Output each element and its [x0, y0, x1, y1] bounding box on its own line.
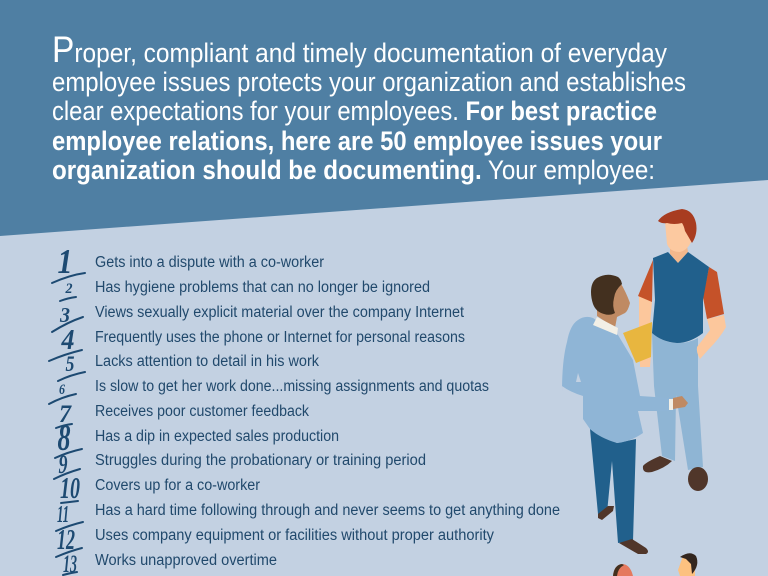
handwritten numbers 1 to 13 — [49, 242, 85, 576]
shoes — [643, 456, 672, 472]
numbered list of issues: Covers up for a co-worker — [95, 477, 260, 494]
numbered list of issues: Lacks attention to detail in his work — [95, 353, 319, 370]
numbered list of issues: Gets into a dispute with a co-worker — [95, 254, 324, 271]
neck — [670, 240, 688, 263]
trousers — [652, 333, 703, 470]
intro text block: employee issues protects your organization and establishes — [52, 67, 686, 97]
header banner — [0, 0, 768, 236]
right arm — [697, 315, 726, 359]
left arm — [639, 296, 652, 327]
handwritten numbers 1 to 13: 5 — [66, 351, 74, 376]
intro text block — [52, 29, 686, 185]
neck and face — [597, 282, 630, 328]
handwritten numbers 1 to 13: 12 — [57, 525, 75, 556]
handwritten numbers 1 to 13: 2 — [65, 281, 73, 297]
partial figure at bottom: coral head — [613, 564, 633, 576]
cuff — [669, 399, 673, 410]
illustration: yellow folder — [623, 322, 652, 363]
vest — [652, 252, 709, 343]
hair — [591, 275, 622, 315]
handwritten numbers 1 to 13: 11 — [57, 502, 69, 528]
numbered list of issues: Is slow to get her work done...missing assignments and quotas — [95, 378, 489, 395]
collar — [593, 317, 618, 335]
sleeves — [638, 260, 653, 302]
hand — [673, 396, 688, 409]
numbered list of issues: Works unapproved overtime — [95, 552, 277, 569]
intro text block: Proper, compliant and timely documentation of everyday — [52, 29, 667, 70]
handwritten numbers 1 to 13: 7 — [59, 401, 72, 428]
shoes — [619, 539, 648, 554]
face — [665, 221, 692, 252]
handwritten numbers 1 to 13: 9 — [58, 450, 68, 479]
trousers — [590, 429, 636, 543]
intro text block: employee relations, here are 50 employee issues your — [52, 126, 662, 156]
numbered list of issues: Struggles during the probationary or training period — [95, 452, 426, 469]
handwritten numbers 1 to 13: 6 — [59, 382, 65, 398]
handwritten numbers 1 to 13: 3 — [59, 303, 70, 327]
numbered list of issues: Has a hard time following through and never seems to get anything done — [95, 502, 560, 519]
handwritten numbers 1 to 13: 10 — [60, 470, 80, 505]
numbered list of issues: Uses company equipment or facilities without proper authority — [95, 527, 494, 544]
handwritten numbers 1 to 13: 4 — [61, 324, 74, 356]
intro text block: organization should be documenting. Your employee: — [52, 155, 655, 185]
numbered list of issues: Has a dip in expected sales production — [95, 428, 339, 445]
illustration: man seen from behind — [562, 275, 688, 554]
jacket — [562, 317, 670, 443]
partial figure at bottom: tan head — [678, 553, 697, 576]
illustration: standing man — [638, 209, 726, 491]
hand under folder — [640, 355, 651, 367]
numbered list of issues: Frequently uses the phone or Internet for personal reasons — [95, 329, 465, 346]
intro text block: clear expectations for your employees. For best practice — [52, 96, 657, 126]
hair — [658, 209, 696, 243]
numbered list of issues: Has hygiene problems that can no longer be ignored — [95, 279, 430, 296]
handwritten numbers 1 to 13: 1 — [58, 242, 72, 281]
numbered list of issues: Receives poor customer feedback — [95, 403, 309, 420]
numbered list of issues — [95, 254, 560, 569]
handwritten numbers 1 to 13: 8 — [58, 418, 70, 459]
numbered list of issues: Views sexually explicit material over the company Internet — [95, 304, 465, 321]
